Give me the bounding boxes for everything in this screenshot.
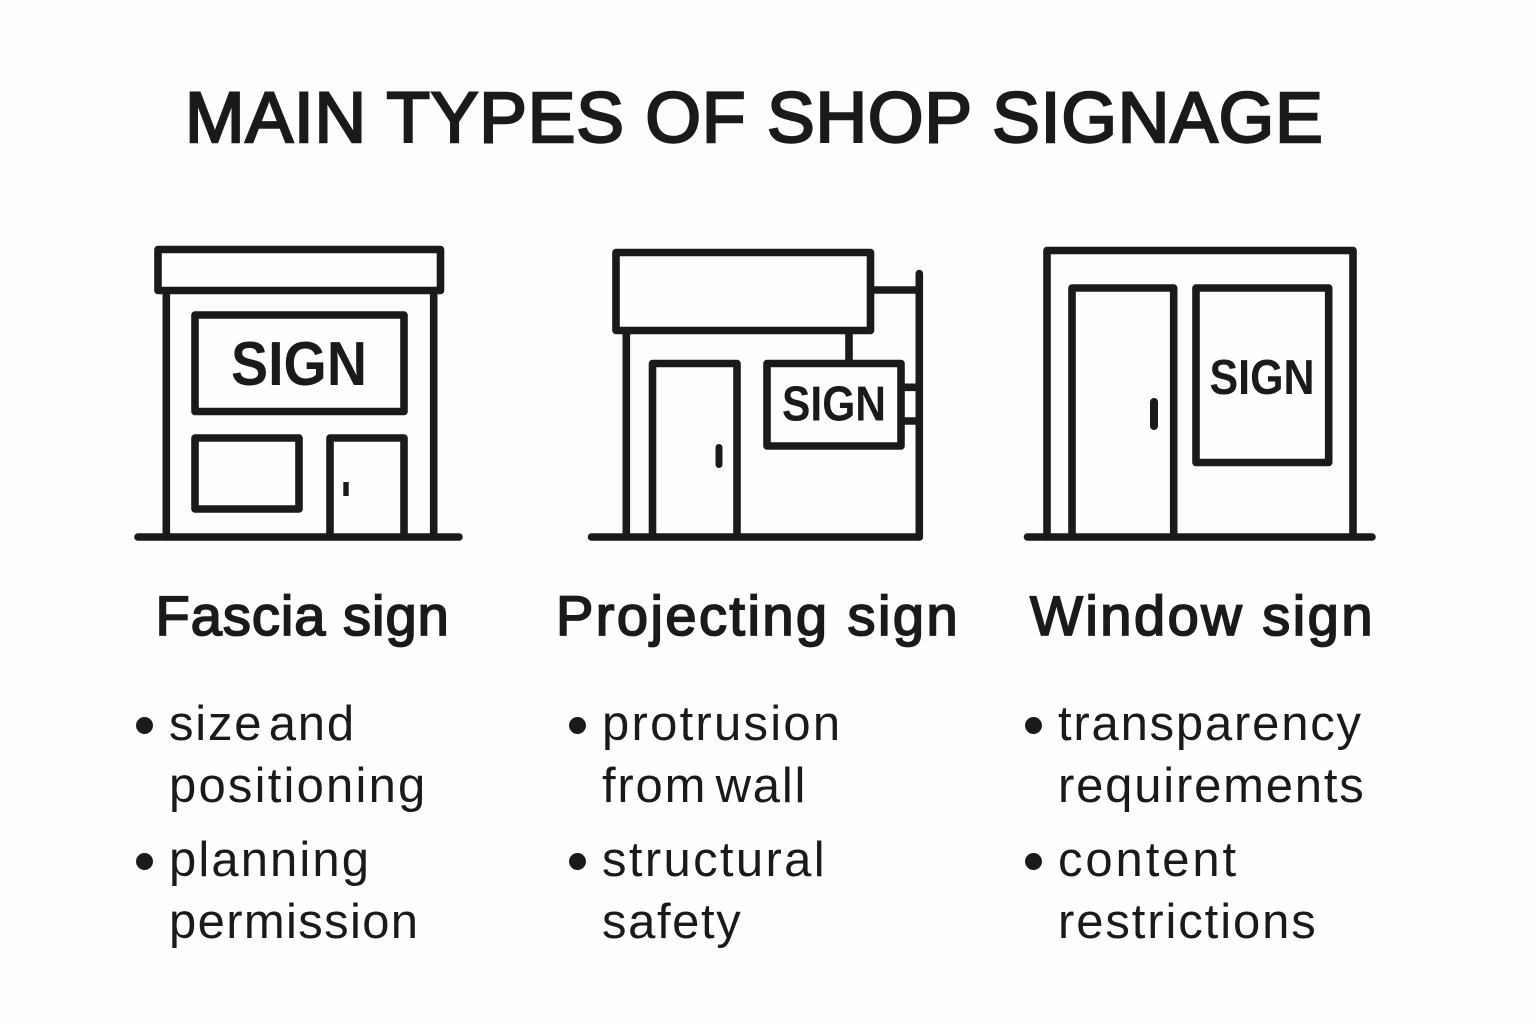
list: projecting sign: protrusion <box>602 697 842 751</box>
list: window sign: content <box>1058 833 1239 887</box>
icon: fascia sign shop <box>134 246 463 541</box>
projecting sign board: SIGN <box>782 378 886 432</box>
sign board <box>195 315 404 412</box>
list: fascia sign: size and <box>169 697 356 751</box>
heading: window sign: Window sign <box>1030 584 1375 647</box>
heading: projecting sign: Projecting sign <box>556 584 960 647</box>
list: window sign: transparency <box>1058 697 1363 751</box>
list: projecting sign: structural <box>602 833 827 887</box>
list: window sign <box>1025 697 1366 949</box>
title: MAIN TYPES OF SHOP SIGNAGE <box>185 78 1324 158</box>
projecting sign board <box>767 364 901 446</box>
list: fascia sign <box>136 697 427 949</box>
list: fascia sign: positioning <box>169 759 427 813</box>
list: fascia sign: permission <box>169 895 419 949</box>
list: window sign: requirements <box>1058 759 1366 813</box>
list: window sign: restrictions <box>1058 895 1318 949</box>
list: projecting sign: from wall <box>602 759 807 813</box>
heading: fascia sign: Fascia sign <box>156 584 450 647</box>
window sign panel <box>1196 288 1329 462</box>
list: projecting sign: safety <box>602 895 742 949</box>
list: fascia sign: planning <box>169 833 371 887</box>
icon: projecting sign shop <box>588 248 924 541</box>
icon: window sign shop <box>1024 246 1376 541</box>
list: projecting sign <box>569 697 842 949</box>
sign board: SIGN <box>231 330 367 399</box>
window sign panel: SIGN <box>1210 351 1314 405</box>
